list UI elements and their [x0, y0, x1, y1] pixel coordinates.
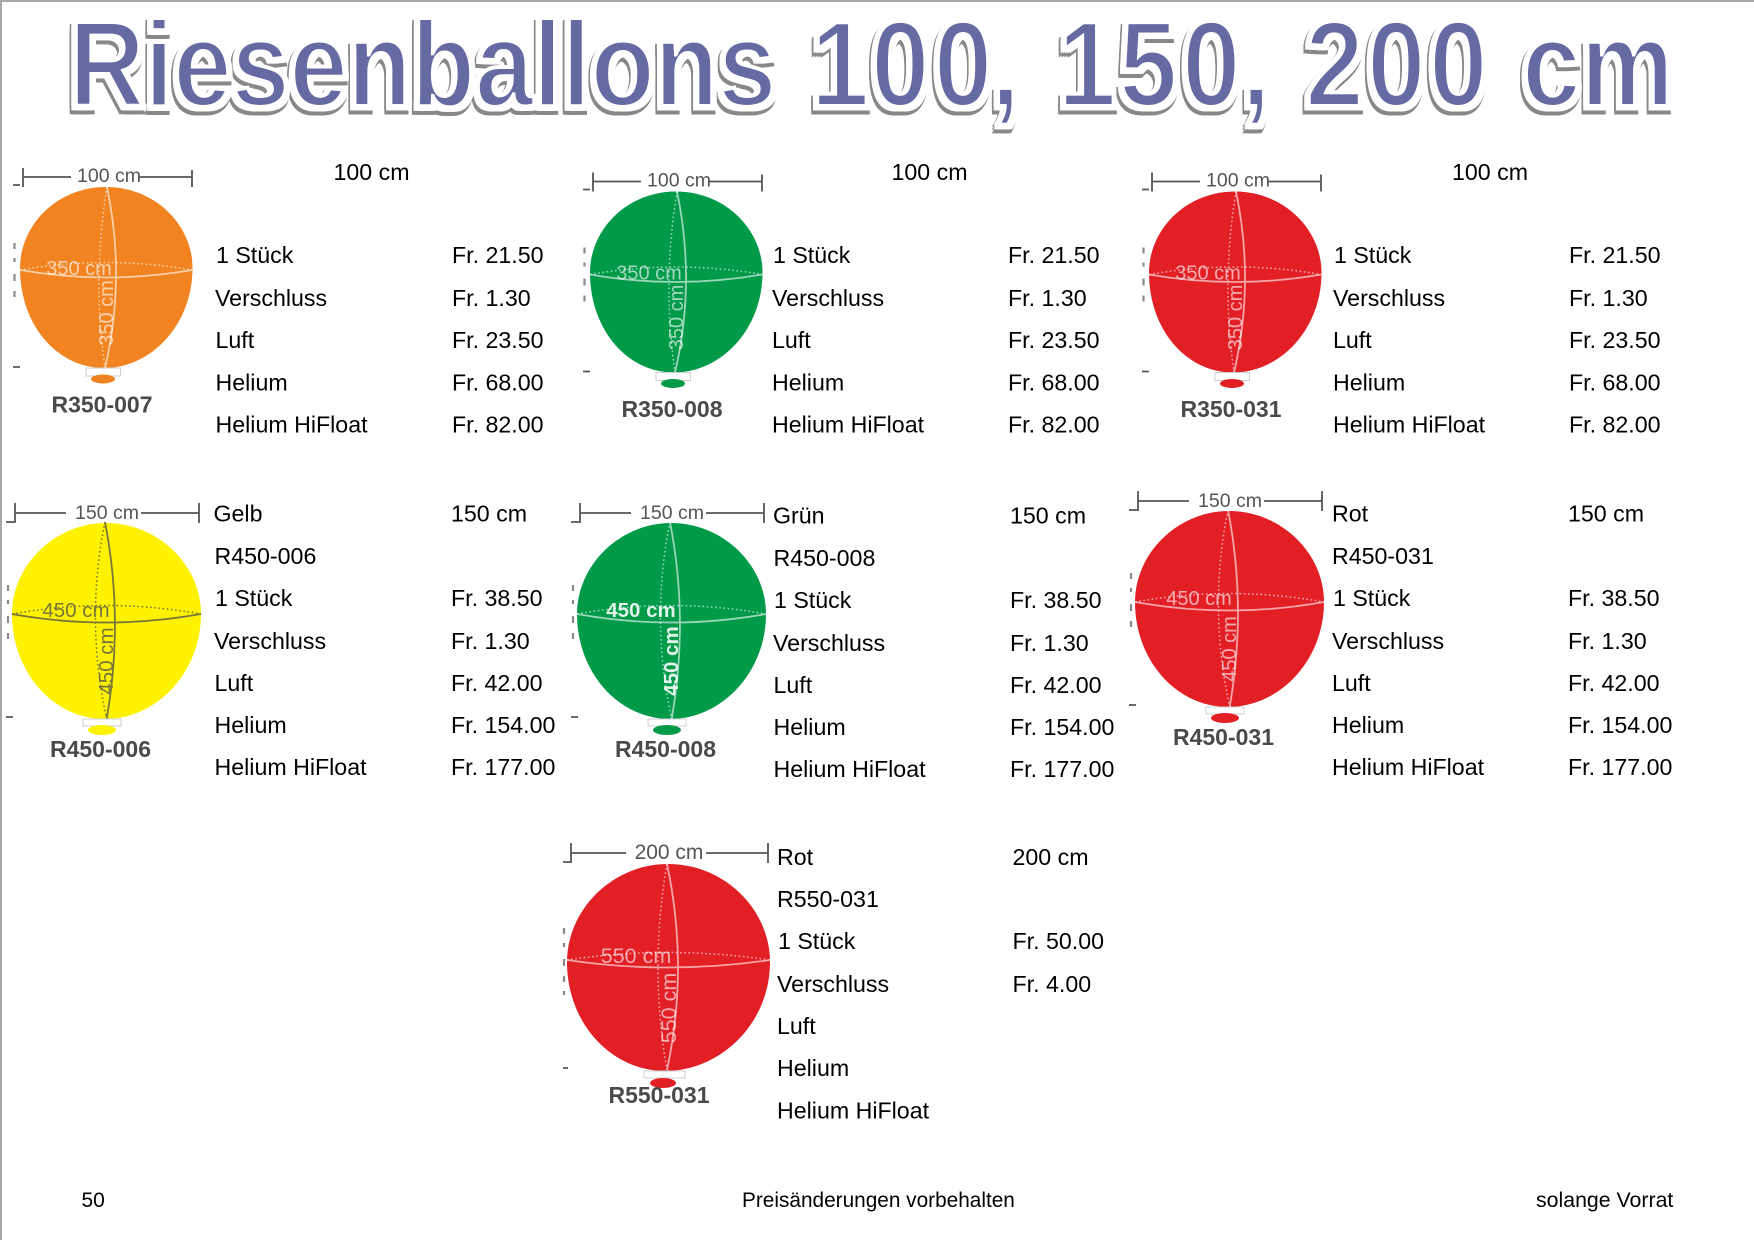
price list: green 150 cm [773, 502, 1114, 782]
balloon diagram: R450-031 [1129, 490, 1324, 750]
price list: green 150 cm: Luft [774, 672, 813, 698]
price list: red 150 cm: Fr. 42.00 [1568, 670, 1660, 696]
price list: yellow 150 cm: 1 Stück [215, 585, 293, 611]
balloon diagram: R450-008: R450-008 [615, 736, 716, 762]
title: Riesenballons 100, 150, 200 cm [69, 0, 1673, 132]
price list: red 150 cm [1332, 500, 1672, 780]
balloon diagram: R450-006: 450 cm [42, 599, 110, 622]
price list: yellow 150 cm: Fr. 42.00 [451, 670, 543, 696]
price list: orange 100 cm: Fr. 68.00 [452, 370, 544, 396]
balloon diagram: R350-008: 350 cm [616, 262, 682, 284]
price list: orange 100 cm: Fr. 21.50 [452, 242, 544, 268]
price list: red 100 cm: Fr. 82.00 [1569, 412, 1661, 438]
balloon diagram: R350-031 [1142, 170, 1322, 422]
balloon diagram: R350-007: 350 cm [96, 280, 118, 346]
price list: green 150 cm: Fr. 154.00 [1010, 714, 1114, 740]
price list: yellow 150 cm [214, 500, 555, 780]
price list: red 150 cm: Verschluss [1332, 628, 1444, 654]
balloon diagram: R550-031: 550 cm [657, 973, 681, 1043]
price list: red 100 cm: Fr. 23.50 [1569, 327, 1661, 353]
footer [82, 1188, 1673, 1212]
price list: green 100 cm: Luft [772, 327, 811, 353]
price list: orange 100 cm: Luft [216, 327, 255, 353]
price list: red 150 cm: Rot [1332, 500, 1369, 526]
price list: red 100 cm: Fr. 1.30 [1569, 285, 1648, 311]
balloon diagram: R350-007: 100 cm [77, 165, 141, 187]
price list: yellow 150 cm: Helium HiFloat [214, 754, 367, 780]
price list: red 200 cm: Luft [777, 1013, 816, 1039]
price list: green 100 cm: Fr. 82.00 [1008, 412, 1100, 438]
panel: red balloon 200 cm [563, 841, 1104, 1124]
price list: red 200 cm: Rot [777, 844, 814, 870]
price list: green 150 cm: R450-008 [774, 545, 875, 571]
price list: red 150 cm: 1 Stück [1333, 585, 1411, 611]
price list: red 200 cm: 200 cm [1012, 844, 1089, 870]
price list: red 100 cm: Fr. 21.50 [1569, 242, 1661, 268]
balloon diagram: R450-006: 450 cm [95, 627, 118, 695]
price list: orange 100 cm: Helium [216, 370, 288, 396]
price list: green 100 cm: Helium [772, 370, 844, 396]
price list: red 100 cm: Fr. 68.00 [1569, 370, 1661, 396]
balloon diagram: R350-007: R350-007 [51, 392, 153, 418]
footer: Preisänderungen vorbehalten [742, 1189, 1015, 1212]
price list: orange 100 cm: Verschluss [215, 285, 327, 311]
balloon diagram: R450-006: 150 cm [75, 502, 139, 524]
price list: red 100 cm: Helium HiFloat [1333, 412, 1486, 438]
price list: red 150 cm: Helium [1332, 712, 1404, 738]
balloon diagram: R550-031: R550-031 [608, 1082, 710, 1108]
balloon diagram: R450-031: 150 cm [1198, 490, 1262, 512]
balloon diagram: R450-006 [6, 502, 201, 762]
price list: red 150 cm: Luft [1332, 670, 1371, 696]
balloon diagram: R450-031: 450 cm [1166, 588, 1232, 610]
price list: yellow 150 cm: Helium [214, 712, 287, 738]
price list: red 100 cm [1333, 159, 1661, 438]
price list: red 200 cm [777, 844, 1104, 1124]
price list: red 200 cm: 1 Stück [778, 928, 856, 954]
price list: yellow 150 cm: Gelb [214, 500, 262, 526]
price list: yellow 150 cm: R450-006 [214, 543, 316, 569]
panel: yellow balloon 150 cm [6, 500, 555, 780]
price list: green 100 cm: Fr. 68.00 [1008, 370, 1100, 396]
price list: green 150 cm: Helium HiFloat [774, 756, 926, 782]
price list: green 100 cm: Fr. 23.50 [1008, 327, 1100, 353]
price list: green 100 cm: Verschluss [772, 285, 884, 311]
price list: red 100 cm: 1 Stück [1334, 242, 1412, 268]
price list: green 150 cm: Fr. 42.00 [1010, 672, 1102, 698]
balloon diagram: R350-008: R350-008 [621, 396, 723, 422]
balloon diagram: R350-031: 350 cm [1175, 262, 1241, 284]
price list: red 100 cm: Verschluss [1333, 285, 1445, 311]
price list: orange 100 cm: Fr. 82.00 [452, 412, 544, 438]
footer: solange Vorrat [1536, 1188, 1673, 1212]
panel: green balloon 100 cm [583, 159, 1100, 438]
price list: orange 100 cm [215, 159, 544, 438]
balloon diagram: R350-031: 100 cm [1206, 170, 1270, 192]
balloon diagram: R450-008 [571, 502, 766, 762]
panel: green balloon 150 cm [571, 502, 1114, 782]
balloon diagram: R350-007: 350 cm [46, 258, 112, 280]
balloon diagram: R350-008 [583, 170, 762, 422]
price list: green 150 cm: Helium [774, 714, 846, 740]
panel: orange balloon 100 cm [13, 159, 544, 438]
price list: red 150 cm: Fr. 154.00 [1568, 712, 1672, 738]
price list: orange 100 cm: 100 cm [334, 159, 410, 185]
balloon diagram: R550-031: 550 cm [601, 944, 671, 968]
price list: green 100 cm [772, 159, 1100, 438]
price list: red 150 cm: Fr. 1.30 [1568, 628, 1647, 654]
price list: green 100 cm: Fr. 1.30 [1008, 285, 1087, 311]
price list: orange 100 cm: Fr. 23.50 [452, 327, 544, 353]
price list: green 100 cm: 1 Stück [773, 242, 851, 268]
price list: red 150 cm: Fr. 177.00 [1568, 754, 1672, 780]
price list: orange 100 cm: 1 Stück [216, 242, 294, 268]
balloon diagram: R550-031: 200 cm [635, 841, 703, 864]
price list: red 200 cm: Fr. 50.00 [1012, 928, 1104, 954]
balloon diagram: R450-006: R450-006 [50, 736, 151, 762]
price list: yellow 150 cm: Verschluss [214, 628, 326, 654]
price list: orange 100 cm: Helium HiFloat [216, 412, 368, 438]
price list: yellow 150 cm: Luft [214, 670, 254, 696]
price list: yellow 150 cm: Fr. 38.50 [451, 585, 543, 611]
price list: green 150 cm: 1 Stück [774, 587, 852, 613]
balloon diagram: R450-008: 150 cm [640, 502, 704, 524]
balloon diagram: R350-031: 350 cm [1225, 285, 1247, 350]
price list: green 150 cm: Fr. 38.50 [1010, 587, 1102, 613]
balloon diagram: R450-031: 450 cm [1219, 616, 1241, 682]
price list: green 150 cm: Fr. 177.00 [1010, 756, 1114, 782]
balloon diagram: R350-007 [13, 165, 192, 418]
price list: red 100 cm: Luft [1333, 327, 1372, 353]
panel: red balloon 150 cm [1129, 490, 1672, 780]
price list: green 100 cm: Helium HiFloat [772, 412, 925, 438]
balloon diagram: R450-031: R450-031 [1173, 724, 1274, 750]
balloon diagram: R450-008: 450 cm [606, 599, 676, 622]
balloon diagram: R450-008: 450 cm [660, 626, 683, 696]
footer: 50 [82, 1189, 105, 1212]
price list: red 200 cm: Helium HiFloat [777, 1098, 930, 1124]
balloon diagram: R350-031: R350-031 [1180, 396, 1282, 422]
balloon diagram: R350-008: 100 cm [647, 170, 711, 192]
price list: red 200 cm: Fr. 4.00 [1012, 971, 1091, 997]
price list: green 150 cm: 150 cm [1010, 502, 1086, 528]
price list: green 100 cm: 100 cm [892, 159, 968, 185]
price list: yellow 150 cm: 150 cm [451, 500, 527, 526]
price list: red 200 cm: R550-031 [777, 886, 879, 912]
balloon diagram: R350-008: 350 cm [666, 285, 688, 350]
price list: green 150 cm: Verschluss [773, 630, 885, 656]
price list: green 100 cm: Fr. 21.50 [1008, 242, 1100, 268]
price list: green 150 cm: Fr. 1.30 [1010, 630, 1089, 656]
price list: red 100 cm: 100 cm [1452, 159, 1528, 185]
price list: red 200 cm: Verschluss [777, 971, 889, 997]
price list: red 100 cm: Helium [1333, 370, 1405, 396]
panel: red balloon 100 cm [1142, 159, 1661, 438]
price list: red 200 cm: Helium [777, 1055, 849, 1081]
price list: red 150 cm: Helium HiFloat [1332, 754, 1485, 780]
balloon diagram: R550-031 [563, 841, 770, 1108]
price list: red 150 cm: Fr. 38.50 [1568, 585, 1660, 611]
price list: red 150 cm: 150 cm [1568, 500, 1644, 526]
price list: green 150 cm: Grün [773, 502, 825, 528]
price list: red 150 cm: R450-031 [1332, 543, 1434, 569]
price list: yellow 150 cm: Fr. 177.00 [451, 754, 555, 780]
price list: yellow 150 cm: Fr. 154.00 [451, 712, 555, 738]
price list: orange 100 cm: Fr. 1.30 [452, 285, 531, 311]
price list: yellow 150 cm: Fr. 1.30 [451, 628, 530, 654]
